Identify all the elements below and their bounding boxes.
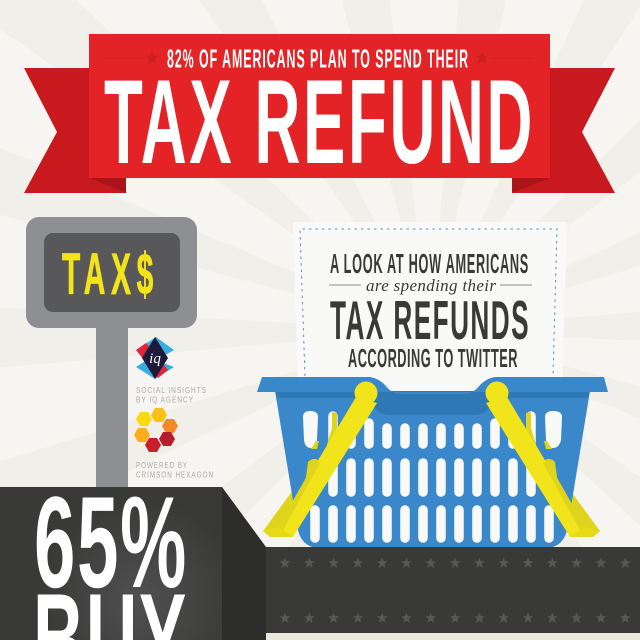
sign screen: [44, 233, 180, 312]
ribbon main panel: [89, 34, 550, 178]
left back handle through basket: [306, 412, 337, 486]
Crimson Hexagon caption: POWERED BY: [136, 461, 188, 470]
basket under-rim shadow: [275, 391, 590, 415]
basket holes: [315, 416, 549, 538]
Crimson Hexagon caption: CRIMSON HEXAGON: [136, 470, 214, 480]
sign board: [26, 217, 197, 328]
dark statistic panel: [0, 487, 222, 640]
ribbon left tail: [24, 68, 126, 193]
ribbon right tail: [512, 68, 615, 193]
Crimson Hexagon caption: [136, 461, 214, 480]
basket body: [275, 391, 590, 548]
outer wide holes: [303, 411, 562, 448]
dark panel fold: [222, 487, 266, 640]
IQ agency logo: [136, 337, 174, 379]
right back handle: [557, 486, 600, 537]
price sign: [26, 217, 197, 487]
Crimson Hexagon logo: [134, 408, 178, 452]
ribbon banner: [24, 34, 615, 193]
left front handle: [263, 382, 378, 537]
sign pole: [96, 320, 128, 487]
left back handle: [263, 486, 306, 537]
right front handle: [486, 382, 600, 537]
paper card: [293, 222, 567, 395]
IQ agency logo: iq: [149, 351, 161, 367]
lower strip: [266, 633, 640, 640]
card line 2: are spending their: [366, 276, 496, 295]
IQ agency caption: SOCIAL INSIGHTS: [136, 386, 207, 395]
IQ agency caption: [136, 386, 207, 404]
IQ agency caption: BY IQ AGENCY: [136, 396, 194, 404]
shopping basket: [257, 377, 608, 548]
sign text: TAX$: [62, 242, 159, 307]
right back handle through basket: [526, 412, 557, 486]
star band: [250, 547, 640, 633]
basket rim: [257, 377, 608, 394]
statistic value: 65%: [34, 469, 188, 615]
